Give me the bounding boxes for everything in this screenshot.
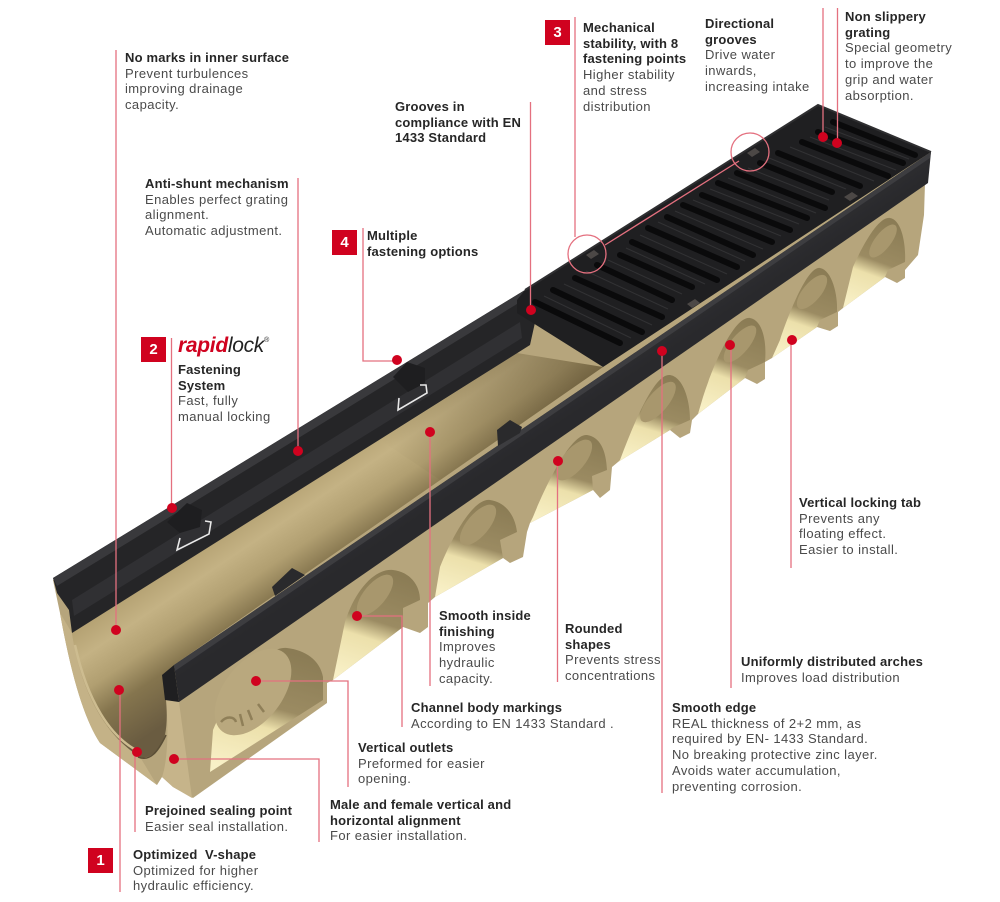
text: smooth edge: Smooth edge [672,700,756,715]
text: rounded shapes: Rounded [565,621,623,636]
text: mechanical stability: Higher stability [583,67,675,82]
text: optimized v-shape [133,847,258,893]
text: fastening system: System [178,378,225,393]
text: mechanical stability: Mechanical [583,20,655,35]
text: anti-shunt mechanism [145,176,289,238]
channel body [53,152,931,798]
text: no marks in inner surface: improving drainage [125,81,243,96]
grating [517,105,931,367]
text: uniformly distributed arches: Improves load distribution [741,670,900,685]
text: fastening system [178,362,271,424]
text: prejoined sealing point: Prejoined sealing point [145,803,292,818]
text: mechanical stability: distribution [583,99,651,114]
rapidlock clip far [393,362,427,410]
text: vertical outlets: Vertical outlets [358,740,453,755]
text: non slippery grating: absorption. [845,88,914,103]
text: uniformly distributed arches: Uniformly distributed arches [741,654,923,669]
text: mechanical stability: stability, with 8 [583,36,678,51]
text: vertical locking tab: Easier to install. [799,542,898,557]
text: optimized v-shape: Optimized for higher [133,863,258,878]
text: directional grooves: increasing intake [705,79,810,94]
text: non slippery grating [845,9,952,103]
text: rounded shapes: shapes [565,637,611,652]
text: prejoined sealing point [145,803,292,834]
text: no marks in inner surface: capacity. [125,97,179,112]
text: smooth edge [672,700,878,794]
text: vertical locking tab: floating effect. [799,526,886,541]
grating slots [535,122,915,343]
text: non slippery grating: Special geometry [845,40,952,55]
text: smooth edge: required by EN- 1433 Standard. [672,731,868,746]
text: vertical locking tab: Prevents any [799,511,880,526]
text: non slippery grating: to improve the [845,56,933,71]
text: smooth edge: REAL thickness of 2+2 mm, as [672,716,861,731]
text: no marks in inner surface [125,50,289,112]
badge 4 [332,230,357,255]
text: rounded shapes [565,621,661,683]
text: mechanical stability [583,20,686,114]
badge 4: 4 [340,234,349,251]
badge 3: 3 [553,24,562,41]
text: directional grooves: Directional [705,16,774,31]
text: multiple fastening options: Multiple [367,228,418,243]
text: directional grooves [705,16,810,94]
text: directional grooves: Drive water [705,47,775,62]
text: vertical locking tab [799,495,921,557]
text: fastening system: manual locking [178,409,271,424]
text: non slippery grating: grip and water [845,72,933,87]
text: grooves in compliance: compliance with EN [395,115,521,130]
text: smooth edge: preventing corrosion. [672,779,802,794]
text: anti-shunt mechanism: Enables perfect grating [145,192,288,207]
badge 1 [88,848,113,873]
text: channel body markings: Channel body markings [411,700,562,715]
badge 3 [545,20,570,45]
text: vertical outlets: opening. [358,771,411,786]
text: male and female alignment: horizontal alignment [330,813,461,828]
text: prejoined sealing point: Easier seal installation. [145,819,288,834]
text: rounded shapes: Prevents stress [565,652,661,667]
text: anti-shunt mechanism: Automatic adjustment. [145,223,282,238]
text: multiple fastening options [367,228,478,259]
text: mechanical stability: fastening points [583,51,686,66]
text: channel body markings [411,700,614,731]
text: smooth inside finishing: Improves [439,639,496,654]
text: male and female alignment: For easier installation. [330,828,467,843]
text: rounded shapes: concentrations [565,668,655,683]
text: directional grooves: inwards, [705,63,757,78]
text: smooth inside finishing [439,608,531,686]
right rail [162,152,931,702]
text: optimized v-shape: hydraulic efficiency. [133,878,254,893]
text: anti-shunt mechanism: Anti-shunt mechanism [145,176,289,191]
badge 2: 2 [149,341,158,358]
text: male and female alignment [330,797,511,843]
grating lock tabs [586,148,858,308]
arch tube shading [351,220,902,621]
text: non slippery grating: grating [845,25,890,40]
text: directional grooves: grooves [705,32,757,47]
text: optimized v-shape: Optimized V-shape [133,847,256,862]
preformed vertical outlet [199,635,307,749]
rapidlock clip near [167,503,211,550]
outer wall arches [210,218,905,772]
text: uniformly distributed arches [741,654,923,685]
text: smooth edge: No breaking protective zinc layer. [672,747,878,762]
locking tabs on inner wall [272,420,522,596]
badge 2 [141,337,166,362]
text: vertical outlets [358,740,485,786]
text: smooth inside finishing: finishing [439,624,495,639]
text: grooves in compliance [395,99,521,145]
text: smooth inside finishing: Smooth inside [439,608,531,623]
callout dots [111,132,842,764]
left rail [53,290,540,633]
text: grooves in compliance: 1433 Standard [395,130,486,145]
text: fastening system: Fastening [178,362,241,377]
text: mechanical stability: and stress [583,83,647,98]
text: vertical locking tab: Vertical locking tab [799,495,921,510]
text: smooth inside finishing: capacity. [439,671,493,686]
text: fastening system: Fast, fully [178,393,238,408]
text: vertical outlets: Preformed for easier [358,756,485,771]
text: anti-shunt mechanism: alignment. [145,207,209,222]
text: non slippery grating: Non slippery [845,9,926,24]
text: multiple fastening options: fastening options [367,244,478,259]
channel interior [72,353,603,758]
text: smooth edge: Avoids water accumulation, [672,763,841,778]
badge 1: 1 [96,852,105,869]
text: smooth inside finishing: hydraulic [439,655,495,670]
grating ribs [544,127,909,338]
text: channel body markings: According to EN 1433 Standard . [411,716,614,731]
leaders and circles [116,8,838,892]
text: grooves in compliance: Grooves in [395,99,465,114]
text: no marks in inner surface: Prevent turbulences [125,66,249,81]
logo: rapidlock: rapidlock® [178,334,269,357]
text: male and female alignment: Male and female vertical and [330,797,511,812]
text: no marks in inner surface: No marks in inner surface [125,50,289,65]
